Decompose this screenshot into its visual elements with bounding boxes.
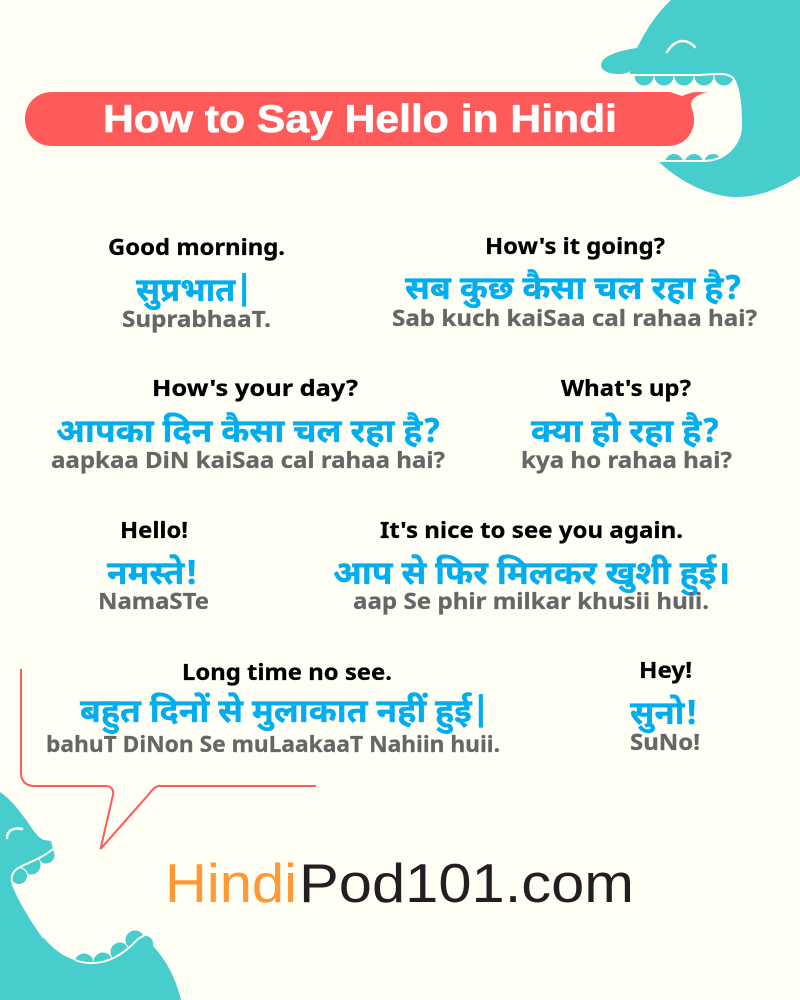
- phrase: hello: [98, 514, 209, 616]
- phrase: how's your day: aapkaa DiN kaiSaa cal rahaa hai?: [51, 444, 445, 475]
- phrase: how's it going: सब कुछ कैसा चल रहा है?: [405, 268, 742, 313]
- phrase: how's it going: How's it going?: [485, 230, 665, 261]
- phrase: nice to see you again: It's nice to see you again.: [380, 514, 683, 545]
- phrase: hey: SuNo!: [630, 726, 700, 757]
- phrase: long time no see: [46, 656, 500, 759]
- phrase: what's up: kya ho rahaa hai?: [521, 444, 732, 475]
- phrase: good morning: सुप्रभात|: [136, 272, 253, 315]
- phrase: long time no see: bahuT DiNon Se muLaakaaT Nahiin huii.: [46, 728, 500, 759]
- phrase: hello: नमस्ते!: [107, 553, 198, 598]
- phrase: hey: [630, 654, 700, 757]
- phrase: how's it going: [392, 230, 757, 333]
- phrase: long time no see: बहुत दिनों से मुलाकात नहीं हुई|: [80, 691, 490, 736]
- phrase: what's up: [521, 372, 732, 475]
- phrase: how's your day: [51, 372, 445, 475]
- title text: How to Say Hello in Hindi: [103, 98, 617, 141]
- logo: HindiPod101.com: Hindi: [165, 852, 297, 914]
- phrase: how's it going: Sab kuch kaiSaa cal rahaa hai?: [392, 302, 757, 333]
- title banner: [25, 92, 708, 146]
- logo: HindiPod101.com: [165, 852, 634, 914]
- icon: bottom left whale: [0, 792, 181, 1000]
- phrase: good morning: SuprabhaaT.: [122, 303, 271, 334]
- logo: HindiPod101.com: Pod101.com: [299, 852, 634, 914]
- speech bubble outline: [21, 669, 316, 849]
- phrase: hey: सुनो!: [630, 694, 698, 738]
- phrase: how's your day: आपका दिन कैसा चल रहा है?: [56, 411, 441, 456]
- phrase: nice to see you again: आप से फिर मिलकर खुशी हुई।: [333, 553, 730, 598]
- phrase: hello: Hello!: [120, 514, 188, 545]
- phrase: nice to see you again: aap Se phir milkar khusii huii.: [353, 585, 709, 616]
- phrase: what's up: What's up?: [561, 372, 691, 403]
- phrase: long time no see: Long time no see.: [182, 656, 392, 687]
- phrase: what's up: क्या हो रहा है?: [531, 411, 720, 456]
- phrase: hello: NamaSTe: [98, 585, 209, 616]
- phrase: good morning: [108, 231, 285, 334]
- icon: top right whale: [601, 0, 800, 197]
- phrase: how's your day: How's your day?: [152, 372, 358, 403]
- phrase: hey: Hey!: [639, 654, 692, 685]
- phrase: nice to see you again: [333, 514, 730, 616]
- phrase: good morning: Good morning.: [108, 231, 285, 262]
